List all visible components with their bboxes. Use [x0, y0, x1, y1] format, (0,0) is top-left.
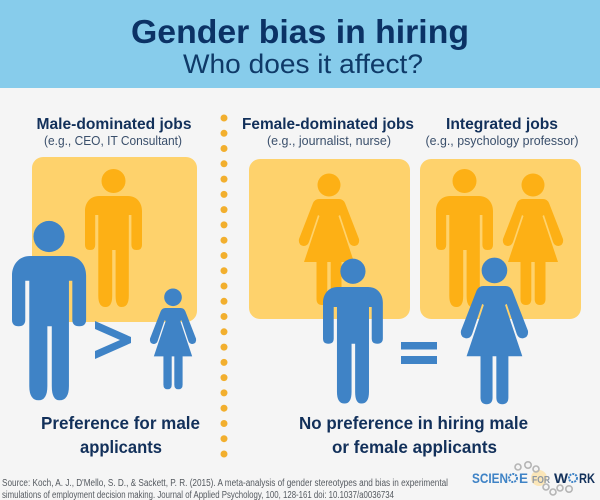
caption: no preference: or female applicants — [332, 437, 497, 457]
title: Gender bias in hiring — [131, 13, 469, 50]
icon: greater-than sign — [95, 321, 131, 359]
logo: Science for Work: SCIEN — [472, 470, 508, 486]
heading: integrated jobs — [426, 116, 578, 148]
panel: male-dominated jobs — [32, 157, 197, 322]
caption: preference for male applicants: applicants — [80, 437, 162, 457]
logo: Science for Work — [472, 462, 595, 495]
icon: equals sign — [401, 342, 437, 364]
subtitle: Who does it affect? — [183, 49, 423, 79]
heading: male-dominated jobs: (e.g., CEO, IT Consultant) — [44, 134, 182, 148]
source citation: Source: Koch, A. J., D'Mello, S. D., & Sackett, P. R. (2015). A meta-analysis of gender stereotypes and bias in experimental — [2, 478, 448, 489]
dotted divider — [220, 114, 228, 458]
source citation — [2, 478, 448, 500]
heading: male-dominated jobs — [36, 116, 192, 148]
heading: female-dominated jobs: Female-dominated jobs — [242, 116, 414, 133]
heading: integrated jobs: Integrated jobs — [446, 116, 558, 133]
caption: no preference — [299, 413, 528, 457]
icon: large blue man — [12, 221, 86, 400]
logo: Science for Work: E — [519, 470, 528, 486]
icon: yellow man, male-dominated — [85, 169, 142, 307]
caption: preference for male applicants — [41, 413, 200, 457]
header band — [0, 0, 600, 88]
icon: yellow woman, female-dominated — [299, 174, 359, 305]
icon: yellow woman, integrated — [503, 174, 563, 305]
icon: yellow man, integrated — [436, 169, 493, 307]
logo: Science for Work: RK — [579, 470, 595, 486]
caption: no preference: No preference in hiring male — [299, 413, 528, 433]
caption: preference for male applicants: Preference for male — [41, 413, 200, 433]
icon: blue man, no preference — [323, 259, 383, 404]
panel: integrated jobs — [420, 159, 581, 319]
heading: female-dominated jobs: (e.g., journalist, nurse) — [267, 134, 391, 148]
logo: Science for Work: W — [554, 470, 569, 486]
icon: blue woman, no preference — [461, 258, 528, 404]
logo: Science for Work: FOR — [532, 474, 550, 486]
icon: small blue woman — [150, 288, 196, 389]
heading: female-dominated jobs — [242, 116, 414, 148]
heading: male-dominated jobs: Male-dominated jobs — [36, 116, 192, 133]
panel: female-dominated jobs — [249, 159, 410, 319]
heading: integrated jobs: (e.g., psychology professor) — [426, 134, 578, 148]
